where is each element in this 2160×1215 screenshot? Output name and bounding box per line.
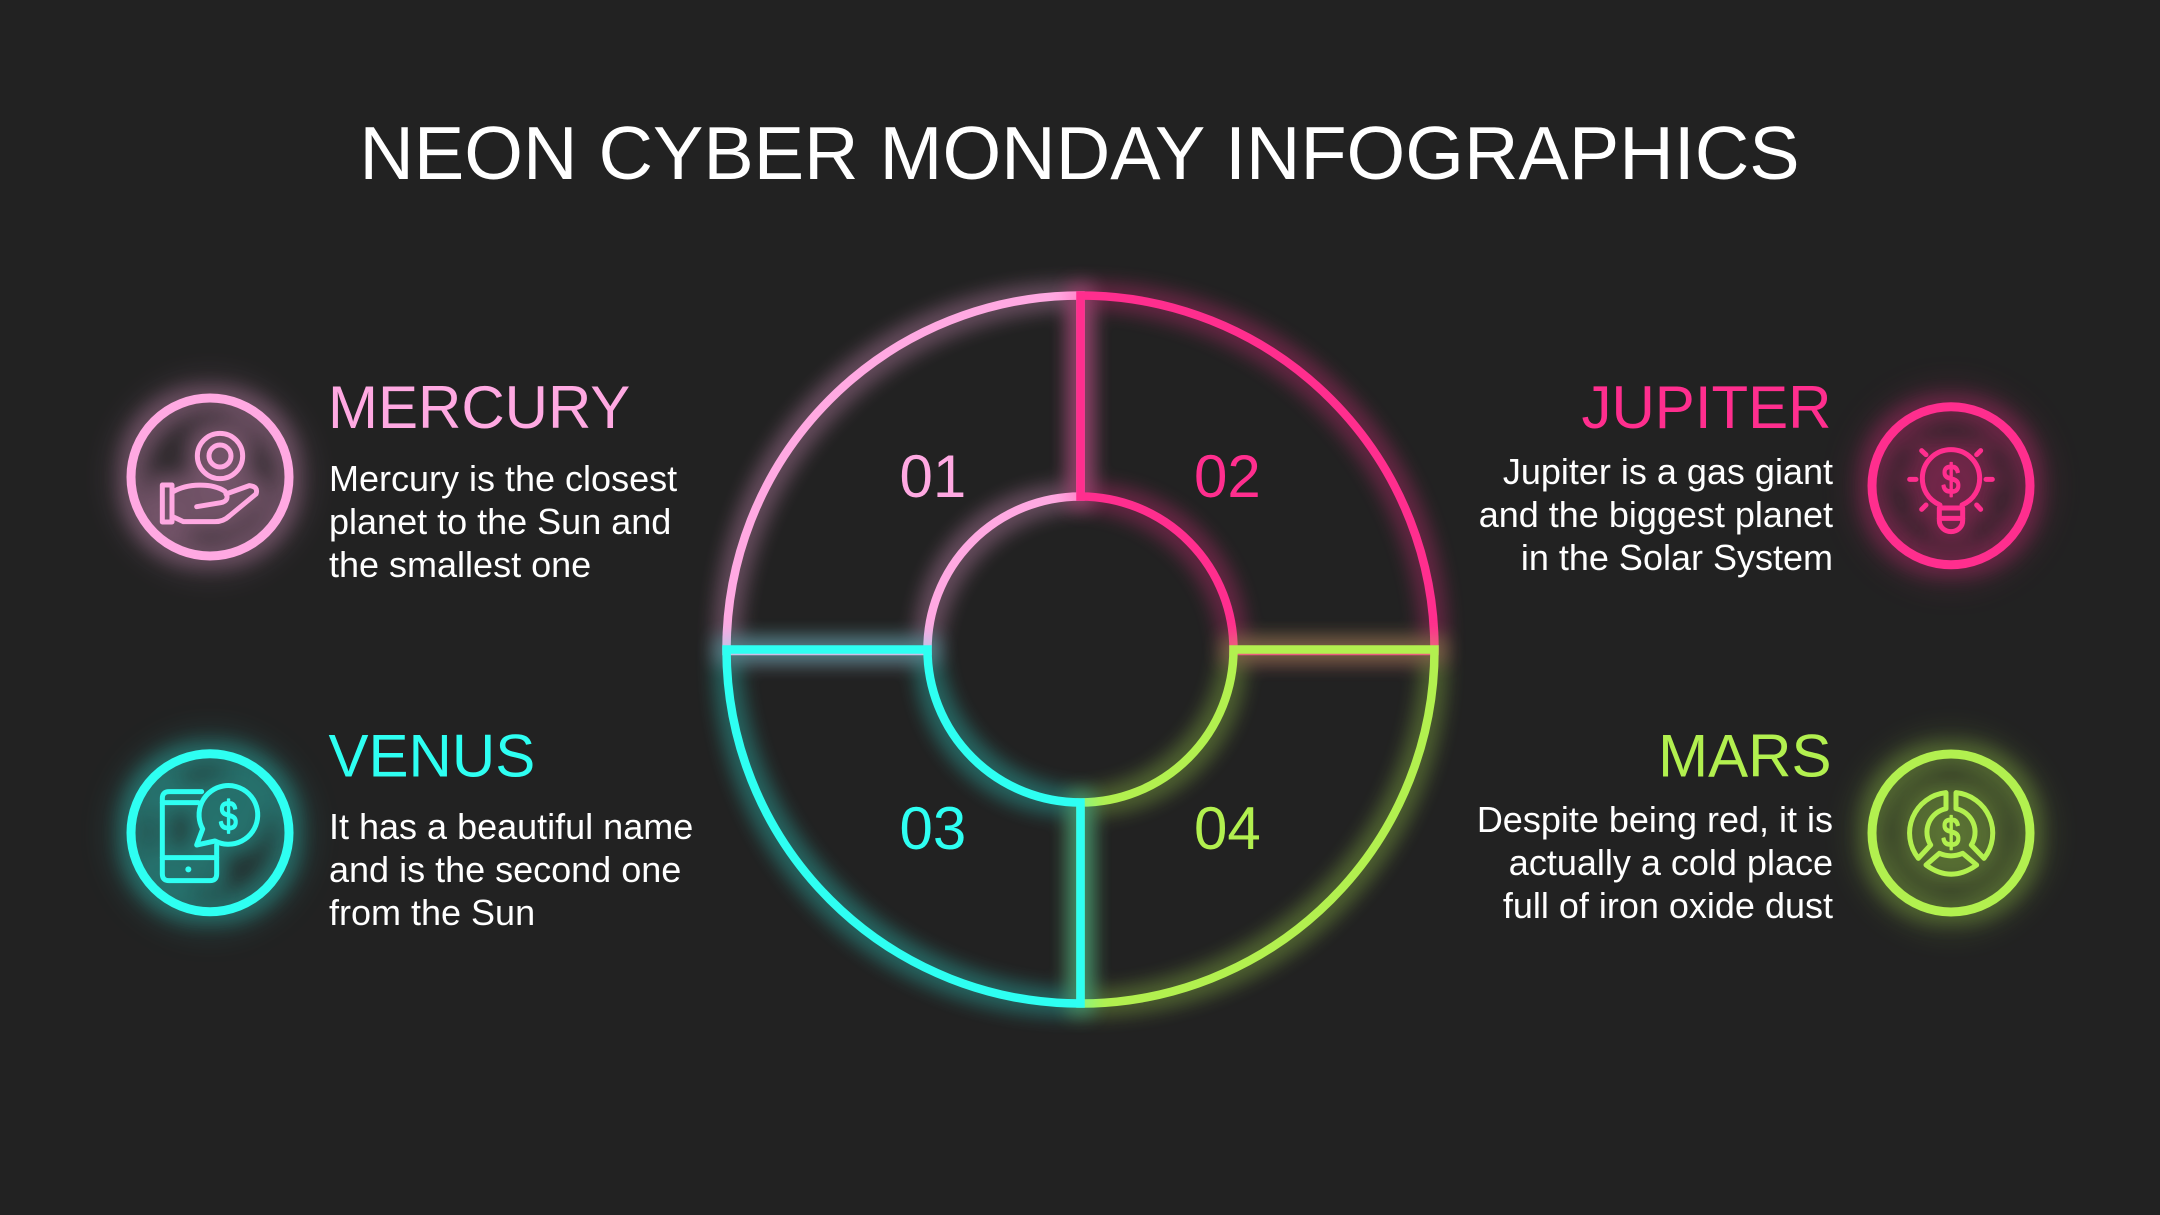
donut chart: four quadrants <box>726 296 1435 1004</box>
number 01: 01 <box>900 443 966 510</box>
icon: phone with dollar bubble <box>131 754 289 912</box>
quadrant 01 outline <box>726 296 1080 651</box>
text: Venus description: and is the second one <box>329 849 681 890</box>
text: Jupiter description: and the biggest planet <box>1479 494 1833 535</box>
heading: Venus: VENUS <box>328 722 535 790</box>
text: Mercury description: the smallest one <box>329 544 591 585</box>
text: Mars description: Despite being red, it is <box>1477 799 1833 840</box>
text: Jupiter description: in the Solar System <box>1521 537 1833 578</box>
number 04: 04 <box>1194 795 1261 862</box>
text: Mars description: actually a cold place <box>1509 842 1833 883</box>
icon: phone with dollar bubble: $ <box>219 792 238 839</box>
icon: dollar pie chart <box>1872 754 2030 912</box>
quadrant 03 outline <box>726 650 1080 1004</box>
icon: light bulb with dollar <box>1872 407 2030 565</box>
icon: hand holding coin <box>131 398 289 556</box>
quadrant 02 outline <box>1080 296 1435 651</box>
text: Mercury description: planet to the Sun and <box>329 501 671 542</box>
number 03: 03 <box>900 795 966 862</box>
text: Mars description: full of iron oxide dust <box>1503 885 1833 926</box>
text: Venus description: It has a beautiful name <box>329 806 693 847</box>
icon: light bulb with dollar: $ <box>1942 456 1960 502</box>
text: Mercury description: Mercury is the closest <box>329 458 677 499</box>
icon: dollar pie chart: $ <box>1942 809 1960 856</box>
number 02: 02 <box>1194 443 1261 510</box>
quadrant 04 outline <box>1080 650 1434 1004</box>
text: Venus description: from the Sun <box>329 892 535 933</box>
title: NEON CYBER MONDAY INFOGRAPHICS <box>359 111 1800 195</box>
text: Jupiter description: Jupiter is a gas giant <box>1503 451 1833 492</box>
heading: Mars: MARS <box>1658 722 1832 790</box>
heading: Jupiter: JUPITER <box>1581 374 1832 441</box>
heading: Mercury: MERCURY <box>328 374 630 441</box>
